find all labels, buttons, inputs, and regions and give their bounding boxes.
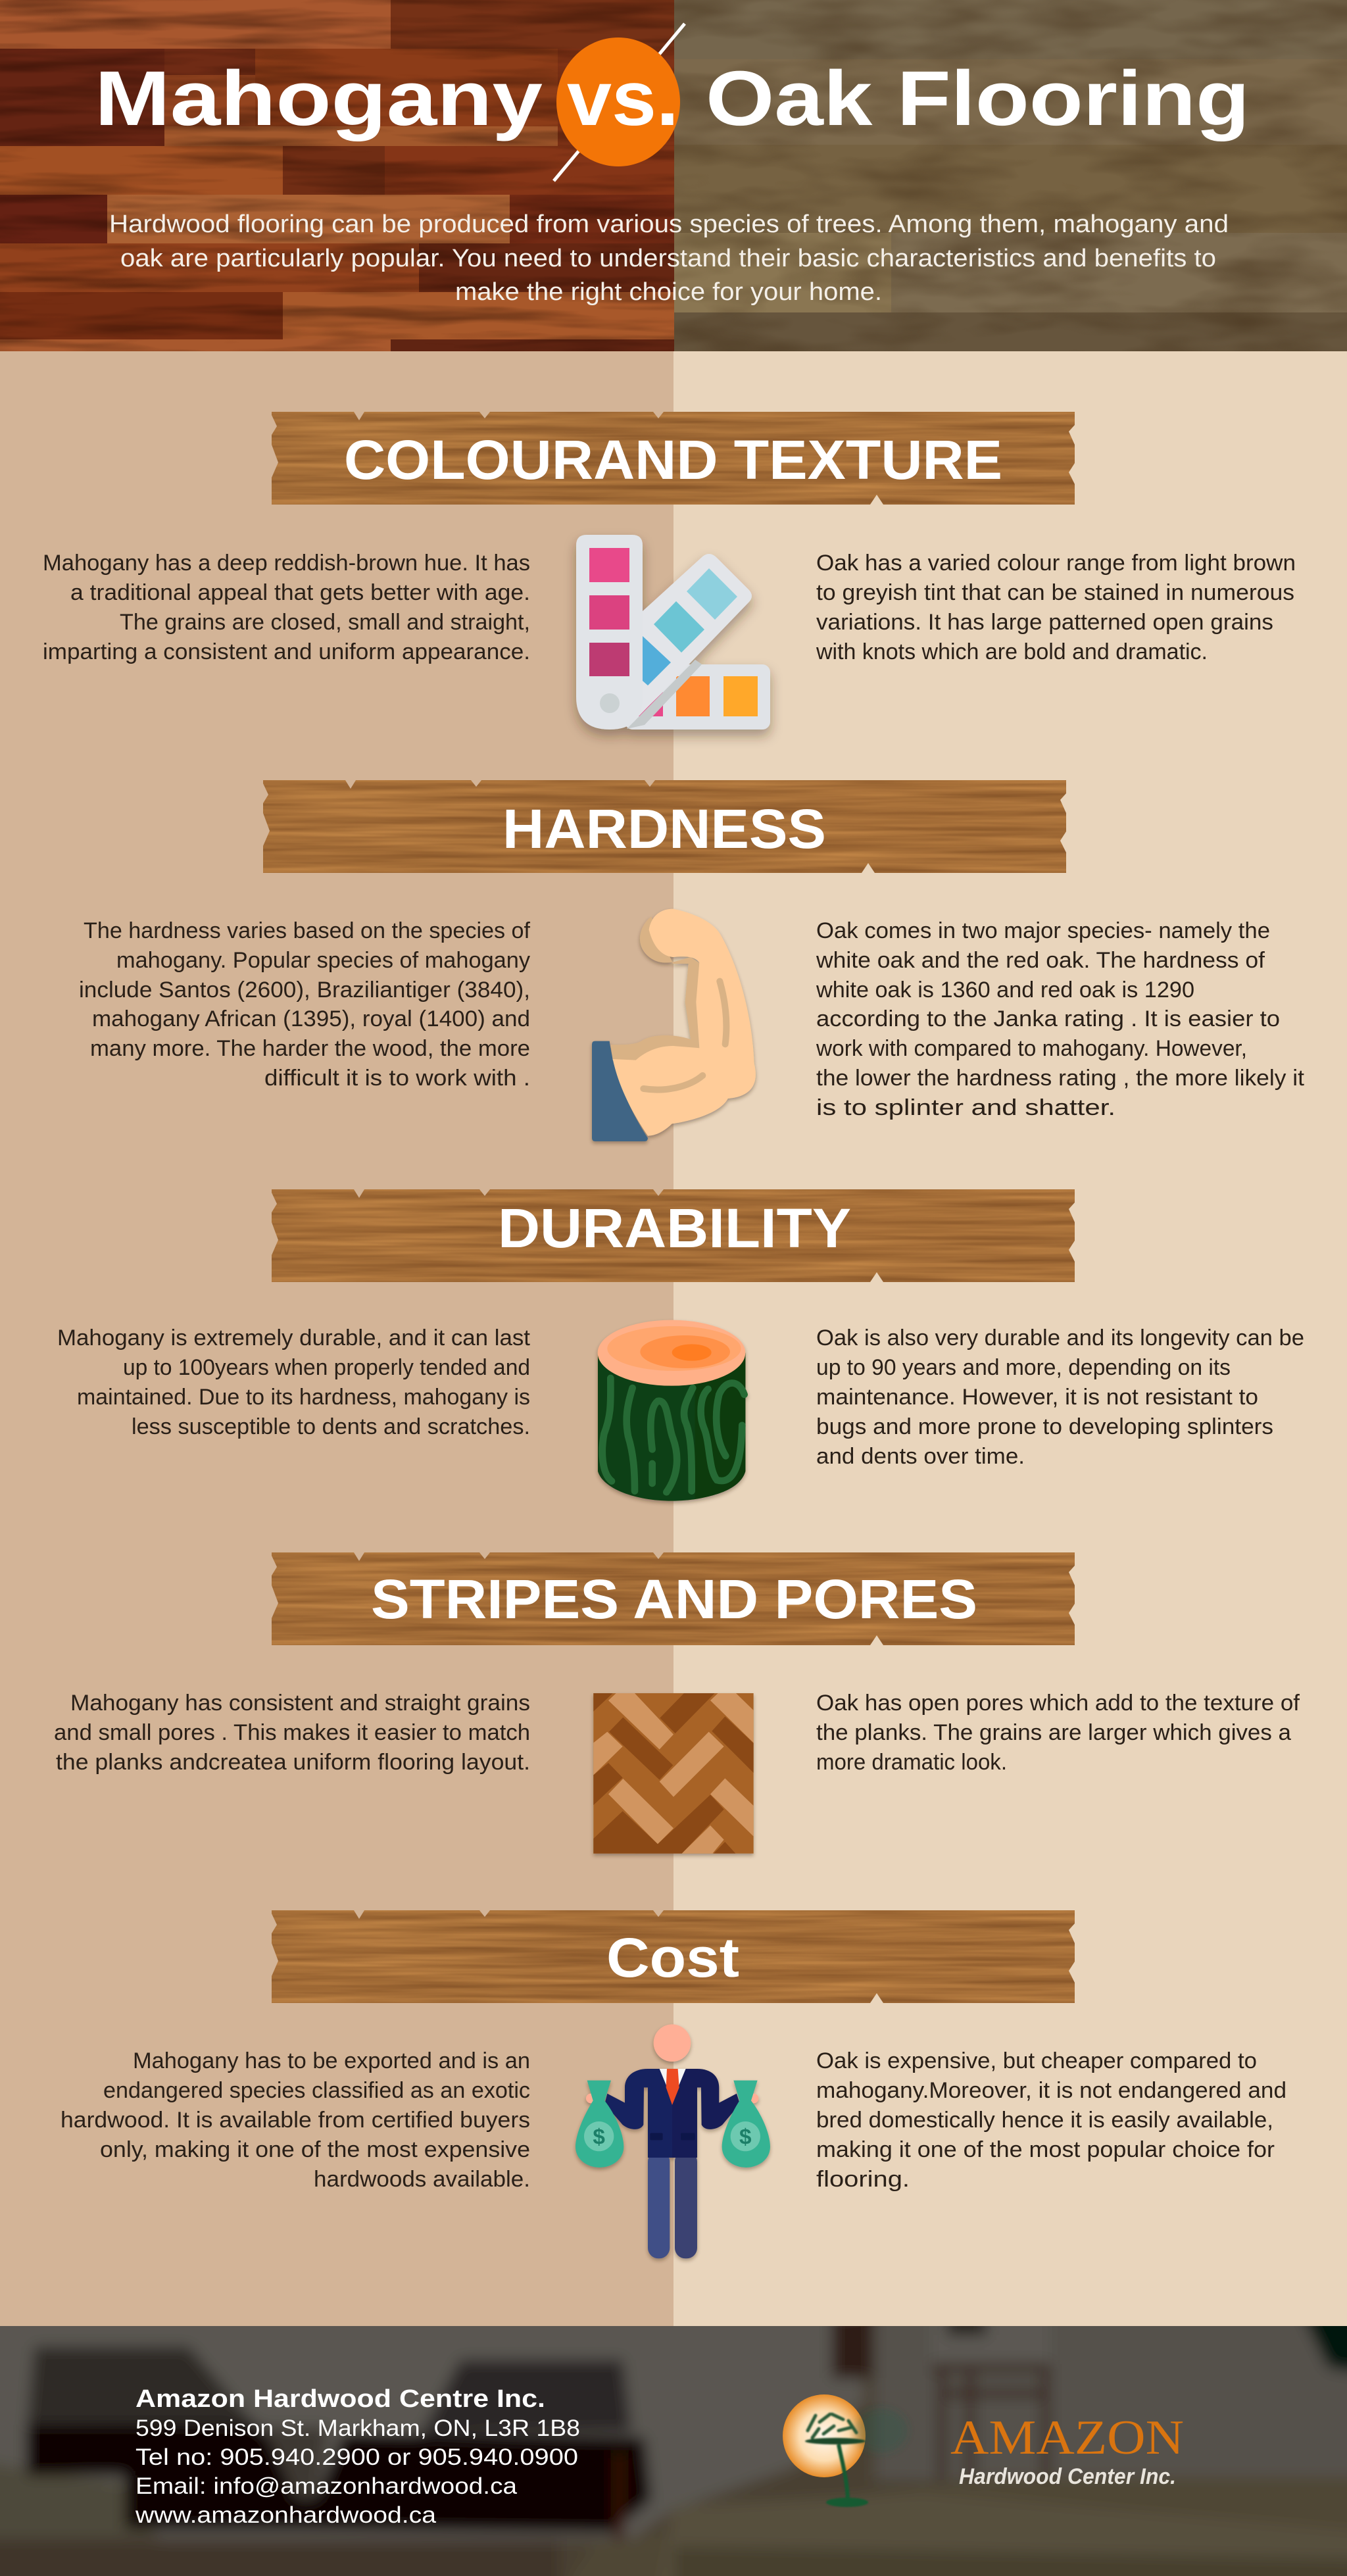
- heading board: hardness: [263, 780, 1066, 873]
- text: mahogany colour: a traditional appeal that gets better with age.: [70, 580, 530, 605]
- text: oak cost: flooring.: [816, 2167, 910, 2192]
- text: oak hardness: white oak is 1360 and red oak is 1290: [816, 978, 1194, 1003]
- text: mahogany hardness: The hardness varies based on the species of: [84, 918, 531, 943]
- text: mahogany colour: Mahogany has a deep reddish-brown hue. It has: [43, 551, 530, 576]
- logo: amazon hardwood: Hardwood Center Inc.: [959, 2464, 1176, 2489]
- heading board: durability: [272, 1189, 1075, 1282]
- footer blurred bedroom photo: [0, 2302, 1347, 2576]
- text: oak durability: up to 90 years and more, depending on its: [816, 1355, 1231, 1380]
- text: mahogany hardness: include Santos (2600), Braziliantiger (3840),: [79, 978, 530, 1003]
- text: oak hardness: the lower the hardness rating , the more likely it: [816, 1066, 1305, 1091]
- page background: right oak tone: [674, 351, 1347, 2326]
- text: mahogany pores: [54, 1691, 530, 1775]
- company contact details: Tel no: 905.940.2900 or 905.940.0900: [135, 2444, 578, 2470]
- oak planks: [674, 0, 1347, 351]
- text: mahogany colour: The grains are closed, small and straight,: [120, 610, 530, 635]
- left money bag: [576, 2081, 624, 2167]
- intro text: make the right choice for your home.: [455, 278, 882, 306]
- text: mahogany colour: [43, 551, 530, 664]
- heading board: durability: DURABILITY: [498, 1197, 851, 1259]
- company contact details: [135, 2385, 580, 2528]
- heading board: stripes and pores: [272, 1552, 1075, 1645]
- intro text: Hardwood flooring can be produced from various species of trees. Among them, mahogany and: [109, 211, 1229, 238]
- text: oak durability: bugs and more prone to developing splinters: [816, 1414, 1273, 1439]
- section: colour and texture: [43, 412, 1296, 730]
- text: mahogany cost: endangered species classified as an exotic: [103, 2078, 530, 2103]
- text: oak durability: and dents over time.: [816, 1444, 1025, 1469]
- text: oak pores: more dramatic look.: [816, 1750, 1007, 1775]
- text: oak colour: to greyish tint that can be stained in numerous: [816, 580, 1294, 605]
- text: mahogany colour: imparting a consistent and uniform appearance.: [43, 639, 530, 664]
- vs. orange circle: [556, 37, 680, 166]
- text: mahogany durability: [57, 1325, 531, 1439]
- section: durability: [57, 1189, 1304, 1501]
- text: oak pores: [816, 1691, 1300, 1775]
- text: oak cost: [816, 2048, 1286, 2192]
- text: oak hardness: is to splinter and shatter.: [816, 1095, 1115, 1120]
- text: mahogany hardness: difficult it is to work with .: [264, 1066, 530, 1091]
- text: oak colour: Oak has a varied colour range from light brown: [816, 551, 1296, 576]
- text: oak hardness: work with compared to mahogany. However,: [816, 1036, 1247, 1061]
- text: oak cost: mahogany.Moreover, it is not endangered and: [816, 2078, 1286, 2103]
- text: mahogany durability: less susceptible to dents and scratches.: [132, 1414, 530, 1439]
- mahogany planks: [0, 0, 675, 351]
- text: oak colour: [816, 551, 1296, 664]
- divider slash line: [554, 24, 685, 181]
- heading board: stripes and pores: STRIPES AND PORES: [371, 1568, 977, 1630]
- text: mahogany pores: and small pores . This makes it easier to match: [54, 1720, 530, 1745]
- text: oak hardness: according to the Janka rating . It is easier to: [816, 1006, 1280, 1031]
- section: stripes and pores: [54, 1552, 1300, 1854]
- text: mahogany durability: maintained. Due to its hardness, mahogany is: [77, 1385, 530, 1410]
- header panel: [0, 0, 1347, 351]
- icon: tree log: [598, 1320, 745, 1501]
- company contact details: www.amazonhardwood.ca: [135, 2502, 437, 2528]
- text: mahogany durability: Mahogany is extremely durable, and it can last: [57, 1325, 531, 1350]
- title: [95, 55, 1250, 142]
- text: oak durability: Oak is also very durable and its longevity can be: [816, 1325, 1304, 1350]
- heading board: cost: [272, 1910, 1075, 2003]
- intro text: [109, 211, 1229, 306]
- section: cost: [61, 1910, 1286, 2258]
- text: oak pores: Oak has open pores which add to the texture of: [816, 1691, 1300, 1716]
- text: mahogany hardness: [79, 918, 531, 1091]
- intro text: oak are particularly popular. You need to understand their basic characteristics and benefits to: [120, 245, 1216, 272]
- text: oak colour: with knots which are bold and dramatic.: [816, 639, 1208, 664]
- text: mahogany cost: hardwoods available.: [314, 2167, 530, 2192]
- title: vs.: [567, 55, 679, 142]
- text: mahogany cost: Mahogany has to be exported and is an: [133, 2048, 530, 2073]
- text: mahogany hardness: many more. The harder the wood, the more: [90, 1036, 530, 1061]
- text: mahogany durability: up to 100years when properly tended and: [123, 1355, 530, 1380]
- text: oak cost: bred domestically hence it is easily available,: [816, 2108, 1273, 2133]
- heading board: colour and texture: [272, 412, 1075, 505]
- section: hardness: [79, 780, 1305, 1141]
- text: oak hardness: Oak comes in two major species- namely the: [816, 918, 1270, 943]
- icon: flexed arm: [592, 909, 756, 1141]
- text: oak durability: [816, 1325, 1304, 1469]
- text: oak cost: making it one of the most popular choice for: [816, 2137, 1275, 2162]
- title: Mahogany: [95, 55, 543, 142]
- heading board: hardness: HARDNESS: [502, 798, 826, 860]
- text: mahogany cost: [61, 2048, 530, 2192]
- text: oak cost: Oak is expensive, but cheaper compared to: [816, 2048, 1257, 2073]
- title: Oak Flooring: [706, 55, 1250, 142]
- text: mahogany pores: the planks andcreatea uniform flooring layout.: [56, 1750, 530, 1775]
- company contact details: Email: info@amazonhardwood.ca: [135, 2473, 518, 2499]
- icon: parquet tile: [593, 1693, 754, 1854]
- text: oak colour: variations. It has large patterned open grains: [816, 610, 1273, 635]
- text: oak hardness: white oak and the red oak. The hardness of: [816, 948, 1265, 973]
- text: mahogany cost: hardwood. It is available from certified buyers: [61, 2108, 530, 2133]
- company contact details: Amazon Hardwood Centre Inc.: [135, 2385, 545, 2413]
- text: oak pores: the planks. The grains are larger which gives a: [816, 1720, 1291, 1745]
- left money bag: $: [593, 2125, 605, 2149]
- icon: businessman holding money bags: [576, 2024, 770, 2258]
- text: oak hardness: [816, 918, 1305, 1120]
- logo: amazon hardwood: [783, 2394, 1184, 2507]
- company contact details: 599 Denison St. Markham, ON, L3R 1B8: [135, 2415, 580, 2441]
- footer panel: [0, 2302, 1347, 2576]
- text: mahogany pores: Mahogany has consistent and straight grains: [70, 1691, 530, 1716]
- heading board: cost: Cost: [606, 1927, 739, 1989]
- page background: left mahogany tone: [0, 351, 674, 2326]
- right money bag: [722, 2081, 770, 2167]
- right money bag: $: [739, 2125, 752, 2149]
- text: mahogany cost: only, making it one of the most expensive: [100, 2137, 530, 2162]
- text: mahogany hardness: mahogany. Popular species of mahogany: [116, 948, 530, 973]
- text: oak durability: maintenance. However, it is not resistant to: [816, 1385, 1258, 1410]
- text: mahogany hardness: mahogany African (1395), royal (1400) and: [92, 1006, 530, 1031]
- icon: colour swatch fan: [576, 535, 770, 730]
- logo tree: [805, 2408, 908, 2507]
- heading board: colour and texture: COLOURAND TEXTURE: [344, 429, 1002, 491]
- logo: amazon hardwood: AMAZON: [950, 2411, 1184, 2465]
